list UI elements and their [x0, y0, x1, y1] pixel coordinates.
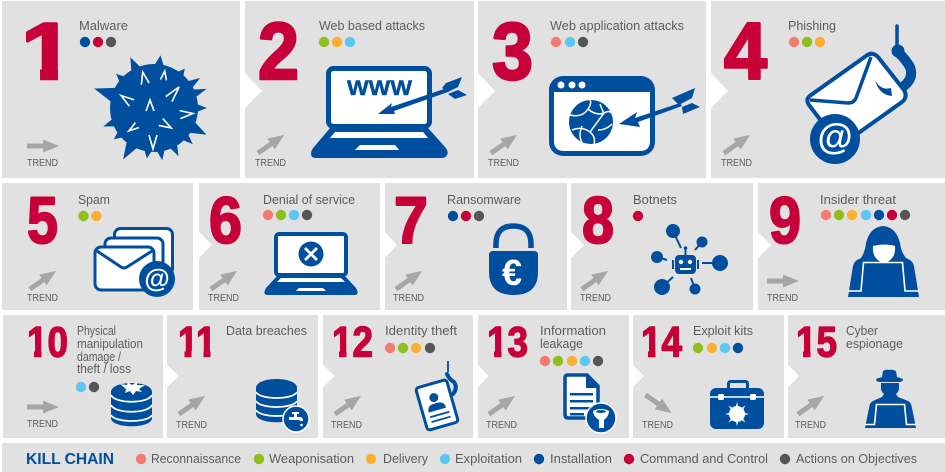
- title: Botnets: Botnets: [633, 193, 677, 207]
- trend label: TREND: [27, 157, 58, 169]
- number 5: 5: [27, 183, 58, 257]
- trend label: TREND: [580, 292, 611, 304]
- panel: 13 Information leakage: [478, 315, 629, 438]
- legend title: KILL CHAIN: [26, 451, 114, 468]
- title: Web based attacks: Web based attacks: [319, 19, 425, 33]
- title: Exploit kits: Exploit kits: [693, 324, 753, 338]
- trend label: TREND: [393, 292, 424, 304]
- title: Physical manipulation damage / theft / loss: theft / loss: [77, 362, 131, 376]
- title: Information leakage: leakage: [540, 337, 583, 351]
- trend label: TREND: [767, 292, 798, 304]
- icon: stacked envelopes: @: [144, 263, 170, 293]
- title: Information leakage: Information: [540, 324, 606, 338]
- legend item: Exploitation: Exploitation: [455, 452, 522, 466]
- panel: 15 Cyber espionage: [788, 315, 945, 438]
- kill chain dots: [789, 37, 825, 47]
- icon: document with funnel: [565, 375, 616, 433]
- trend label: TREND: [795, 419, 826, 431]
- kill chain dots: [78, 211, 102, 221]
- title: Web application attacks: Web application attacks: [550, 19, 684, 33]
- legend: kill chain: [2, 443, 945, 472]
- trend arrow: flat: [767, 274, 799, 288]
- trend label: TREND: [27, 292, 58, 304]
- title: Physical manipulation damage / theft / loss: Physical: [77, 324, 116, 338]
- panel: 6 Denial of service: [199, 183, 380, 310]
- kill chain dots: [551, 37, 588, 47]
- trend arrow: rising: [26, 265, 60, 295]
- number 10: 10: [27, 318, 68, 366]
- icon: stacked envelopes: [95, 228, 175, 297]
- icon: leaking database: [256, 379, 309, 432]
- kill chain dots: [821, 210, 910, 220]
- title: Cyber espionage: [846, 324, 903, 351]
- kill chain dots: [263, 210, 312, 220]
- trend arrow: rising: [207, 265, 241, 295]
- trend arrow: flat: [27, 140, 59, 152]
- icon: virus: [91, 55, 210, 163]
- panel: 1 Malware: [2, 1, 240, 178]
- trend label: TREND: [176, 419, 207, 431]
- panel: 12 Identity theft: [323, 315, 473, 438]
- panel: 11 Data breaches: [167, 315, 318, 438]
- icon: laptop with arrow: WWW: [347, 77, 412, 100]
- trend arrow: flat: [27, 400, 59, 414]
- number 14: 14: [641, 318, 682, 366]
- title: Phishing: Phishing: [788, 19, 836, 33]
- title: Cyber espionage: espionage: [846, 337, 903, 351]
- icon: ID card on hook: [416, 361, 458, 431]
- legend item: Weaponisation: Weaponisation: [269, 452, 354, 466]
- trend arrow: falling: [642, 389, 675, 419]
- title: Information leakage: [540, 324, 606, 351]
- trend label: TREND: [721, 157, 752, 169]
- number 2: 2: [258, 7, 299, 97]
- panel: 2 Web based attacks: [245, 1, 474, 178]
- trend arrow: rising: [254, 129, 288, 159]
- trend label: TREND: [642, 419, 673, 431]
- trend arrow: rising: [720, 129, 754, 159]
- trend arrow: rising: [175, 390, 209, 420]
- trend arrow: rising: [392, 265, 426, 295]
- trend arrow: rising: [331, 390, 365, 420]
- number 9: 9: [769, 183, 801, 257]
- title: Data breaches: Data breaches: [226, 324, 307, 338]
- icon: laptop with arrow: [311, 68, 467, 158]
- panel: 5 Spam: [2, 183, 193, 310]
- title: Denial of service: Denial of service: [263, 193, 355, 207]
- trend label: TREND: [27, 418, 58, 430]
- icon: padlock with euro: €: [502, 252, 522, 293]
- title: Ransomware: Ransomware: [447, 193, 521, 207]
- trend label: TREND: [208, 292, 239, 304]
- icon: robot network: [651, 224, 728, 295]
- kill chain dots: [76, 382, 99, 392]
- number 15: 15: [796, 318, 837, 366]
- kill chain dots: [80, 37, 116, 47]
- icon: hooded figure with laptop: [848, 226, 919, 297]
- trend arrow: rising: [487, 129, 521, 159]
- number 13: 13: [487, 318, 528, 366]
- panel: 9 Insider threat: [758, 183, 945, 310]
- kill chain dots: [385, 343, 435, 353]
- kill chain dots: [448, 211, 484, 221]
- panel: 10 Physical manipulation: [3, 315, 163, 438]
- title: Physical manipulation damage / theft / loss: [77, 324, 143, 376]
- title: Insider threat: Insider threat: [820, 193, 897, 207]
- trend arrow: rising: [794, 390, 828, 420]
- number 1: 1: [21, 7, 74, 97]
- panel: 3 Web application attacks: [478, 1, 706, 178]
- legend item: Actions on Objectives: Actions on Objectives: [796, 452, 917, 466]
- title: Spam: Spam: [78, 193, 110, 207]
- icon: envelope on fishing hook: @: [817, 116, 853, 157]
- number 11: 11: [178, 318, 216, 366]
- kill chain dots: [693, 343, 743, 353]
- trend label: TREND: [331, 419, 362, 431]
- kill chain dots: [540, 356, 603, 366]
- legend item: Command and Control: Command and Control: [640, 452, 768, 466]
- kill chain dot: [633, 211, 643, 221]
- icon: spy with hat and laptop: [865, 370, 916, 428]
- panel: 8 Botnets: [571, 183, 753, 310]
- trend label: TREND: [255, 157, 286, 169]
- icon: padlock with euro: [489, 226, 538, 295]
- trend arrow: rising: [485, 390, 519, 420]
- icon: damaged database: [111, 382, 152, 426]
- title: Physical manipulation damage / theft / loss: manipulation: [77, 337, 143, 351]
- legend item: Reconnaissance: Reconnaissance: [151, 452, 241, 466]
- title: Identity theft: Identity theft: [385, 324, 458, 338]
- title: Cyber espionage: Cyber: [846, 324, 878, 338]
- number 7: 7: [394, 183, 428, 257]
- number 6: 6: [209, 183, 242, 257]
- icon: browser window with globe and arrow: [549, 76, 700, 156]
- icon: laptop with blocked sign: [264, 234, 358, 295]
- icon: envelope on fishing hook: [807, 26, 911, 164]
- number 8: 8: [582, 183, 614, 257]
- number 4: 4: [724, 7, 767, 97]
- icon: toolbox with virus: [710, 382, 764, 429]
- title: Physical manipulation damage / theft / loss: damage /: [77, 350, 121, 364]
- panel: 4 Phishing: [711, 1, 945, 178]
- legend item: Delivery: Delivery: [383, 452, 429, 466]
- title: Malware: Malware: [79, 19, 128, 33]
- number 12: 12: [332, 318, 373, 366]
- trend label: TREND: [486, 419, 517, 431]
- legend item: Installation: Installation: [550, 452, 612, 466]
- kill chain dots: [319, 37, 355, 47]
- trend label: TREND: [488, 157, 519, 169]
- trend arrow: rising: [578, 265, 612, 295]
- panel: 7 Ransomware: [385, 183, 567, 310]
- panel: 14 Exploit kits: [633, 315, 784, 438]
- number 3: 3: [492, 7, 533, 97]
